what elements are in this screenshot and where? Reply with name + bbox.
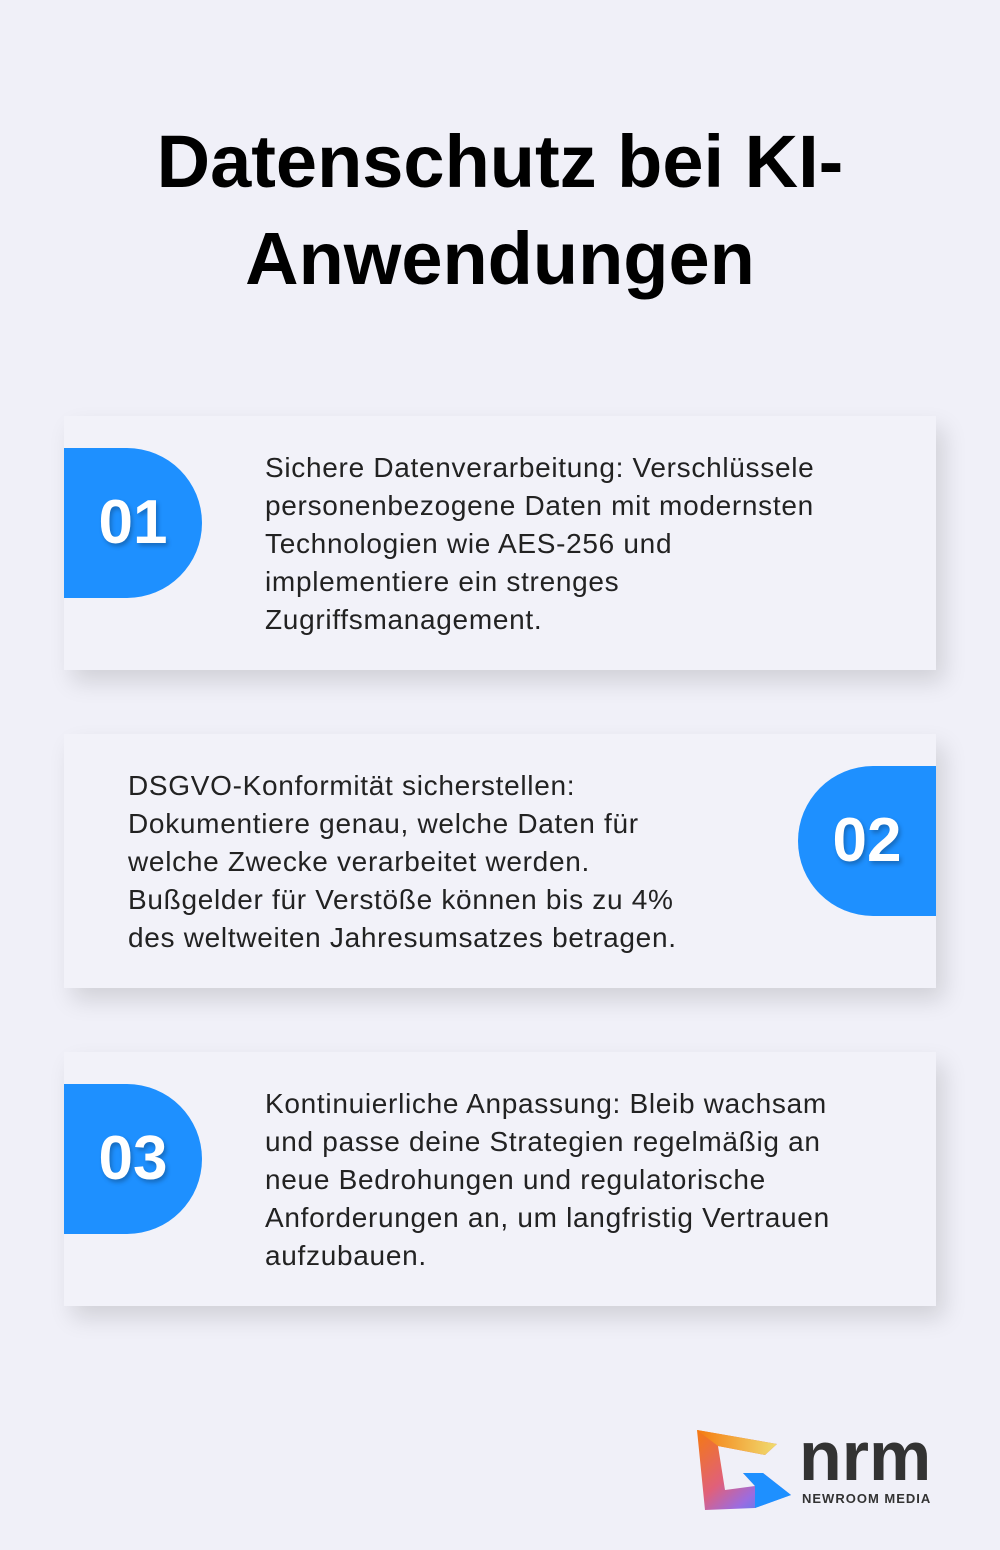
text 02: Bußgelder für Verstöße können bis zu 4% xyxy=(128,884,674,915)
icon: logo mark xyxy=(697,1430,791,1510)
text 03 xyxy=(265,1088,830,1271)
text 02: des weltweiten Jahresumsatzes betragen. xyxy=(128,922,677,953)
text 02: DSGVO-Konformität sicherstellen: xyxy=(128,770,575,801)
badge 01 xyxy=(64,448,202,598)
badge 03: 03 xyxy=(99,1124,167,1193)
text 01: Technologien wie AES-256 und xyxy=(265,528,672,559)
panel: card 03 xyxy=(64,1052,936,1306)
text 01: Zugriffsmanagement. xyxy=(265,604,542,635)
text 03: neue Bedrohungen und regulatorische xyxy=(265,1164,766,1195)
text 03: und passe deine Strategien regelmäßig an xyxy=(265,1126,821,1157)
title: Datenschutz bei KI- xyxy=(157,120,843,203)
badge 02: 02 xyxy=(833,806,901,875)
text 02: Dokumentiere genau, welche Daten für xyxy=(128,808,639,839)
text 01 xyxy=(265,452,814,635)
text 02 xyxy=(128,770,677,953)
panel: card 02 xyxy=(64,734,936,988)
logo: NEWROOM MEDIA xyxy=(802,1491,931,1506)
panel: card 01 xyxy=(64,416,936,670)
logo xyxy=(697,1417,931,1510)
text 01: personenbezogene Daten mit modernsten xyxy=(265,490,814,521)
text 01: implementiere ein strenges xyxy=(265,566,619,597)
text 03: Anforderungen an, um langfristig Vertrauen xyxy=(265,1202,830,1233)
badge 01: 01 xyxy=(99,488,167,557)
badge 03 xyxy=(64,1084,202,1234)
text 02: welche Zwecke verarbeitet werden. xyxy=(128,846,590,877)
title xyxy=(157,120,843,300)
logo text: nrm xyxy=(799,1417,931,1495)
text 03: Kontinuierliche Anpassung: Bleib wachsam xyxy=(265,1088,827,1119)
badge 02 xyxy=(798,766,936,916)
text 03: aufzubauen. xyxy=(265,1240,427,1271)
text 01: Sichere Datenverarbeitung: Verschlüssele xyxy=(265,452,814,483)
title: Anwendungen xyxy=(245,217,755,300)
